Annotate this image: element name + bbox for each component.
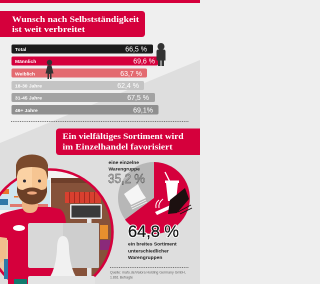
icon: woman — [46, 60, 54, 79]
laptop — [28, 223, 99, 284]
heading: assortment: Ein vielfältiges Sortiment wird — [62, 132, 184, 141]
label: broad assortment: Warengruppen — [128, 255, 162, 261]
bar: 46+ Jahre — [12, 105, 158, 114]
label: single product group: eine einzelne — [108, 160, 139, 166]
ring — [0, 170, 112, 284]
illustration: shop circle with retailer — [0, 154, 115, 284]
shop background — [0, 170, 112, 276]
source — [110, 270, 186, 280]
value: 64,8 %: 64,8 % — [128, 222, 179, 241]
bar: 46+ Jahre: 69,1% — [133, 108, 153, 114]
label: single product group: Warengruppe — [108, 166, 140, 172]
retailer — [0, 154, 66, 284]
bar: 18-30 Jahre: 62,4 % — [117, 83, 139, 90]
bar: Weiblich: 63,7 % — [120, 71, 142, 78]
value: 64,8 %: 64,8 % — [128, 222, 179, 241]
bar: Total: 66,5 % — [125, 46, 147, 54]
top stripe — [0, 0, 200, 3]
icon: cigarette with smoke — [155, 199, 176, 215]
bar: 31-45 Jahre — [12, 93, 155, 102]
value: 35,2 %: 35,2 % — [108, 172, 145, 186]
source: Quelle: mafo.de/Valora Holding Germany GmbH, — [110, 270, 186, 274]
icon: newspaper stack — [168, 188, 192, 214]
icon: man — [156, 43, 166, 66]
beard — [17, 186, 47, 204]
bar: 46+ Jahre: 46+ Jahre — [15, 108, 38, 114]
bar: Total — [12, 44, 153, 54]
bar: 18-30 Jahre — [12, 81, 144, 90]
heading: self-employment wish: ist weit verbreitet — [12, 25, 85, 34]
neck and face — [22, 200, 38, 213]
eyes — [23, 180, 26, 182]
name tag — [13, 225, 25, 231]
bar: Männlich: 69,6 % — [133, 58, 155, 66]
heading: self-employment wish — [0, 11, 145, 37]
bar: Weiblich: Weiblich — [15, 72, 35, 78]
bar: 31-45 Jahre: 67,5 % — [127, 95, 149, 102]
pie chart: 64.8 / 35.2 — [118, 162, 192, 234]
bar: Weiblich — [12, 68, 147, 78]
label: broad assortment — [128, 242, 177, 261]
label: single product group — [108, 160, 140, 172]
icon: book — [124, 184, 147, 209]
till screen — [70, 204, 102, 276]
icon: cup with straw — [165, 172, 179, 201]
heading: self-employment wish: Wunsch nach Selbstständigkeit — [12, 15, 139, 24]
hair — [16, 154, 48, 180]
bar: 18-30 Jahre: 18-30 Jahre — [15, 84, 42, 90]
source: 1.861 Befragte — [110, 276, 133, 280]
label: broad assortment: unterschiedlicher — [128, 248, 169, 254]
bar: Männlich — [12, 56, 158, 66]
bar: 31-45 Jahre: 31-45 Jahre — [15, 96, 42, 102]
bar: Männlich: Männlich — [15, 59, 36, 65]
shirt — [0, 207, 66, 284]
bar: Total: Total — [15, 47, 27, 53]
bar chart — [12, 44, 158, 114]
heading: assortment: im Einzelhandel favorisiert — [62, 142, 173, 152]
label: broad assortment: ein breites Sortiment — [128, 242, 177, 248]
heading: assortment — [56, 128, 200, 155]
